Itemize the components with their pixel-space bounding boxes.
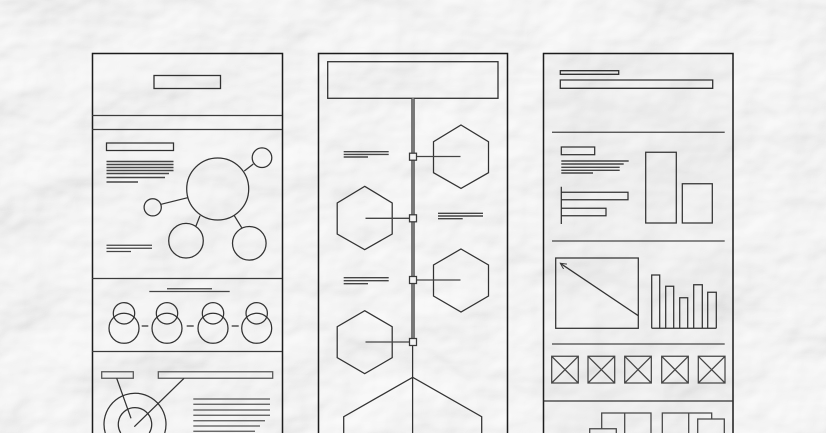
right panel heading boxes	[560, 71, 713, 88]
right panel text block	[561, 161, 629, 173]
bubble diagram	[144, 148, 272, 260]
timeline text lines	[344, 152, 483, 284]
centre panel header box	[328, 62, 498, 98]
left panel caption lines	[106, 245, 152, 252]
hexagon left one	[337, 186, 392, 250]
arrow chart box	[556, 258, 638, 328]
image placeholder row	[552, 356, 725, 383]
target chart	[104, 378, 184, 433]
bottom left overlapping boxes	[590, 413, 651, 433]
hexagon right one	[434, 125, 488, 188]
timeline spine	[411, 98, 415, 433]
left panel header dividers	[92, 116, 282, 352]
panel: left wireframe	[92, 54, 282, 433]
right panel outer frame	[544, 54, 733, 433]
column chart	[652, 275, 716, 328]
top rules above venn row	[149, 289, 230, 292]
tall and short boxes	[646, 152, 712, 223]
hexagon left two	[337, 311, 392, 374]
left panel title box	[154, 76, 220, 88]
panel: centre timeline wireframe	[318, 54, 508, 433]
node connectors	[366, 156, 460, 342]
venn row	[109, 303, 272, 343]
left panel bottom text block	[193, 399, 270, 431]
left panel outer frame	[92, 54, 282, 433]
horizontal bar chart	[561, 187, 628, 224]
centre panel outer frame	[318, 54, 508, 433]
panel: right charts wireframe	[544, 54, 733, 433]
label boxes for target chart	[102, 372, 273, 378]
bottom right overlapping boxes	[662, 413, 724, 433]
left panel subheading box	[106, 143, 174, 150]
large bottom hexagon	[344, 377, 482, 433]
hexagon right two	[434, 249, 488, 312]
right panel bottom rule	[544, 400, 733, 402]
right panel section rules	[552, 132, 725, 344]
left panel text block	[106, 162, 174, 182]
timeline nodes	[410, 153, 416, 346]
right panel subheading box	[561, 147, 595, 155]
